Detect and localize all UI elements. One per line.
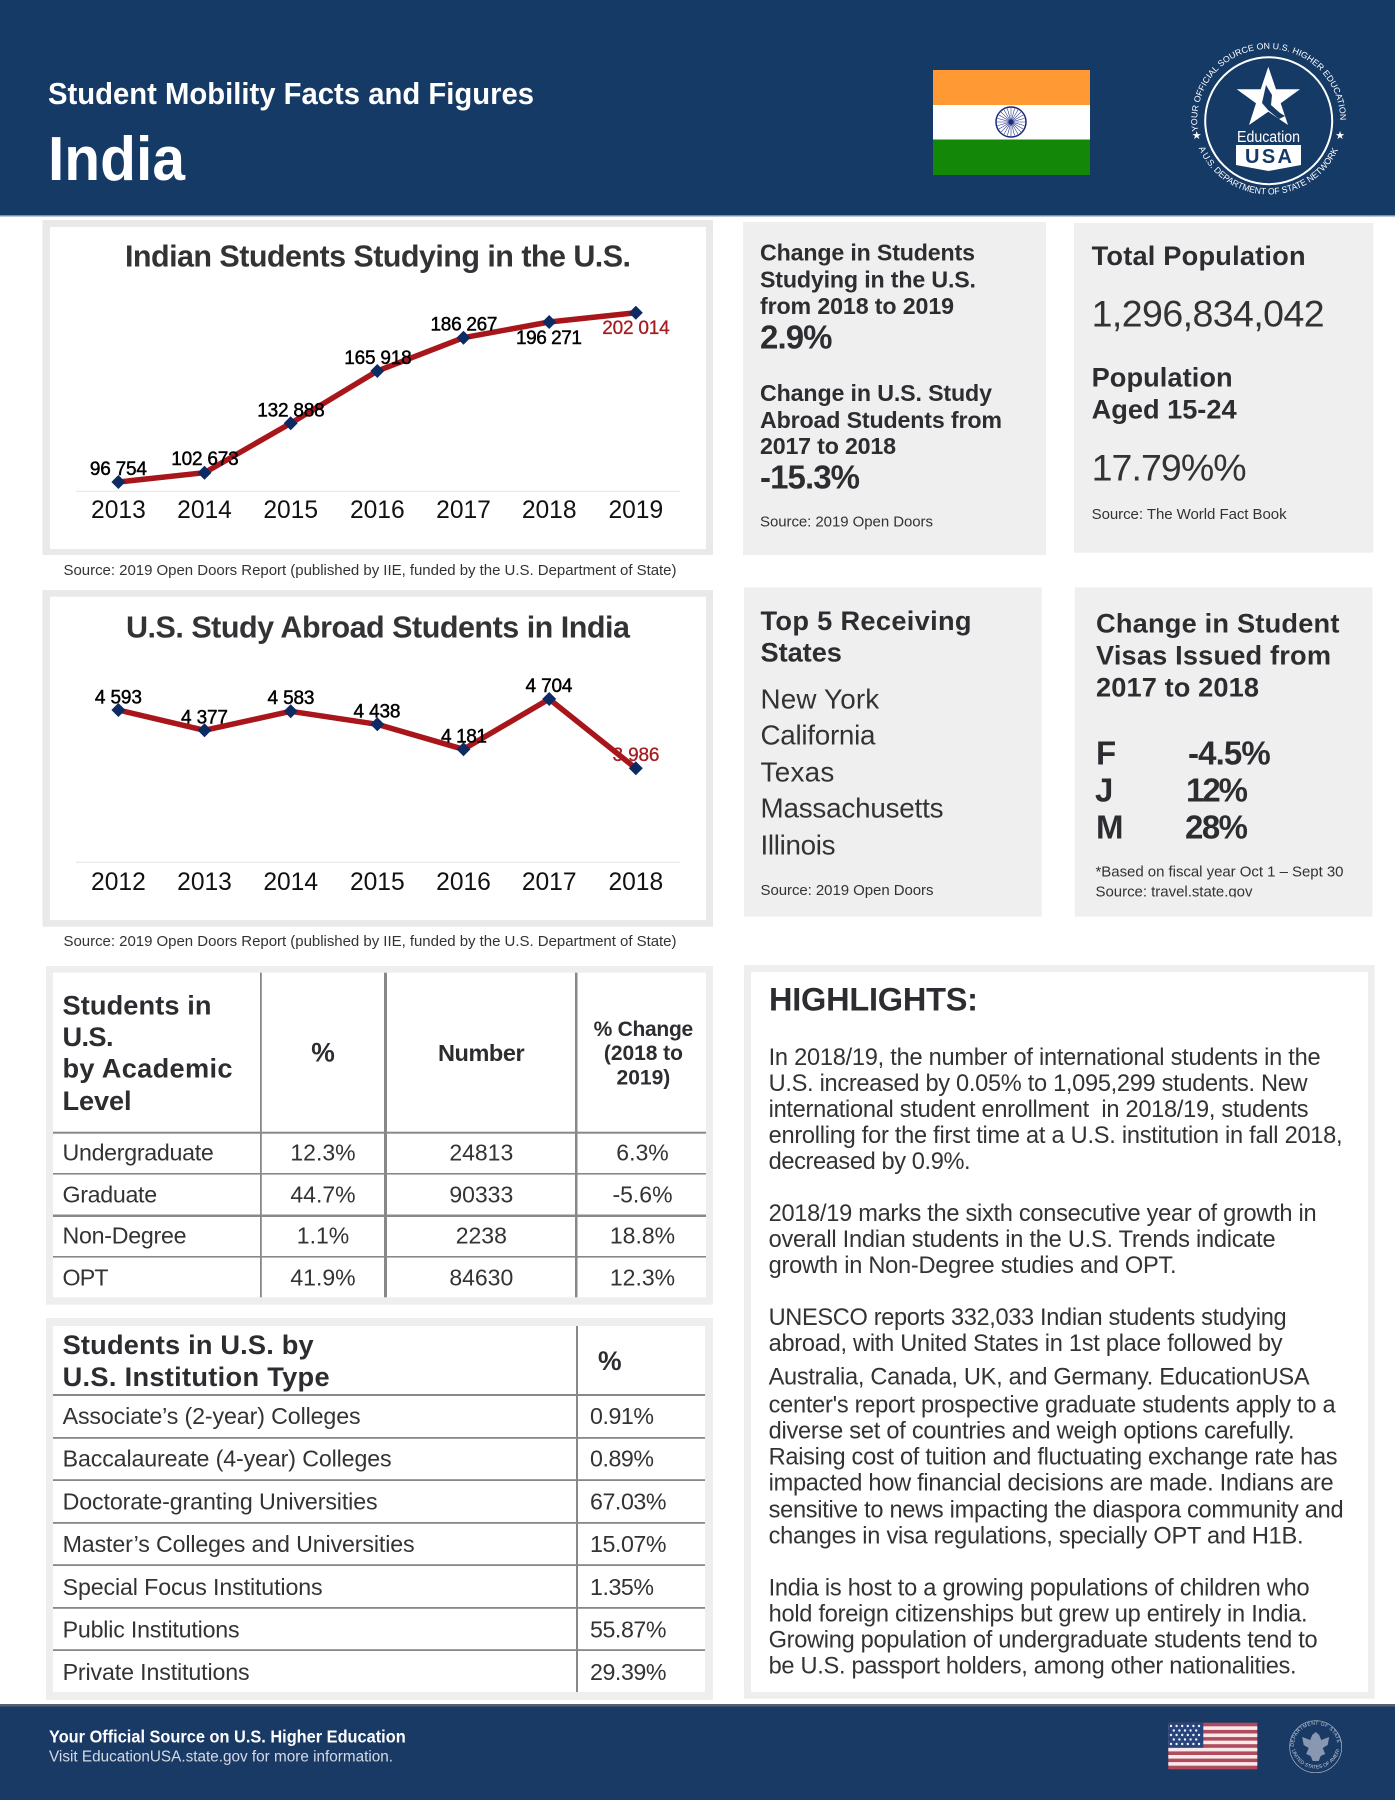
population aged heading — [1092, 362, 1237, 425]
value labels: 102 673 — [171, 449, 239, 470]
row: Non-Degree: 1.1% — [297, 1222, 349, 1248]
table header: (2018 to — [604, 1042, 683, 1065]
value labels: 165 918 — [344, 348, 412, 369]
row: Undergraduate: Undergraduate — [62, 1140, 214, 1166]
row: Master's — [63, 1531, 667, 1557]
population aged heading: Population — [1092, 362, 1233, 393]
table header: % Change — [594, 1018, 693, 1041]
row: Master's: 15.07% — [590, 1531, 666, 1557]
table header: 2019) — [617, 1066, 670, 1089]
paragraph 3: Raising cost of tuition and fluctuating exchange rate has — [769, 1444, 1338, 1470]
panel: students by academic level table — [46, 966, 713, 1305]
source note: Source: travel.state.gov — [1096, 884, 1253, 901]
population aged value: 17.79%% — [1092, 447, 1247, 489]
icon: EducationUSA logo: ★ — [1335, 130, 1345, 142]
icon: India flag — [933, 70, 1090, 175]
row: Non-Degree: 18.8% — [610, 1222, 675, 1248]
paragraph 3: UNESCO reports 332,033 Indian students studying — [769, 1305, 1287, 1331]
heading: 2017 to 2018 — [1096, 672, 1259, 703]
stat: study abroad change — [760, 380, 1002, 495]
header banner — [0, 0, 1395, 216]
row: Associate's: 0.91% — [590, 1403, 654, 1429]
paragraph 4 — [769, 1576, 1318, 1679]
row: OPT — [62, 1265, 675, 1291]
table header: % — [598, 1346, 622, 1376]
panel: change in students — [743, 222, 1046, 555]
paragraph 2: 2018/19 marks the sixth consecutive year of growth in — [769, 1201, 1317, 1227]
row: Public — [63, 1617, 667, 1643]
row: Graduate — [62, 1182, 673, 1208]
icon: EducationUSA logo — [1191, 42, 1346, 194]
table header: by Academic — [62, 1053, 232, 1084]
panel: students by institution type table — [46, 1318, 713, 1700]
year axis labels: 2017 — [436, 497, 491, 524]
stat: students in U.S. change: from 2018 to 2019 — [760, 293, 954, 319]
states list: California — [760, 720, 876, 751]
visa values: 28% — [1185, 808, 1248, 845]
value labels: 4 704 — [526, 676, 573, 697]
panel: student visas — [1075, 587, 1372, 917]
source note chart 2: Source: 2019 Open Doors Report (published by IIE, funded by the U.S. Department of State) — [64, 933, 676, 950]
value labels — [90, 315, 670, 480]
year axis labels: 2015 — [350, 869, 405, 896]
row: OPT: 12.3% — [610, 1265, 675, 1291]
paragraph 3: impacted how financial decisions are made. Indians are — [769, 1471, 1334, 1497]
row: Private — [63, 1659, 667, 1685]
row: OPT: OPT — [62, 1265, 108, 1291]
source note: Source: The World Fact Book — [1092, 506, 1287, 523]
line series — [111, 306, 643, 489]
row: Associate's — [63, 1403, 654, 1429]
paragraph 3: diverse set of countries and weigh options carefully. — [769, 1418, 1295, 1444]
footer text: Visit EducationUSA.state.gov for more information. — [49, 1749, 393, 1766]
population aged heading: Aged 15-24 — [1092, 394, 1237, 425]
row: Special Focus: 1.35% — [590, 1574, 654, 1600]
stat: study abroad change: -15.3% — [760, 458, 860, 495]
year axis labels: 2018 — [522, 497, 577, 524]
stat: study abroad change: 2017 to 2018 — [760, 433, 896, 459]
year axis labels: 2014 — [263, 869, 318, 896]
panel: U.S. study abroad line chart — [42, 590, 713, 927]
stat: students in U.S. change — [760, 240, 976, 355]
icon: EducationUSA logo: USA — [1245, 146, 1292, 168]
paragraph 3: Australia, Canada, UK, and Germany. EducationUSA — [769, 1364, 1310, 1390]
value labels: 196 271 — [516, 328, 582, 349]
panel: population — [1074, 223, 1373, 553]
source note: Source: 2019 Open Doors — [760, 882, 934, 899]
visa values: 12% — [1186, 771, 1248, 808]
year axis labels: 2014 — [177, 497, 232, 524]
value labels: 186 267 — [430, 315, 498, 336]
source note: Source: 2019 Open Doors — [760, 514, 933, 531]
row: Baccalaureate: 0.89% — [590, 1446, 654, 1472]
paragraph 2: overall Indian students in the U.S. Trends indicate — [769, 1227, 1276, 1253]
row: Baccalaureate: Baccalaureate (4-year) Colleges — [63, 1446, 392, 1472]
value labels: 4 583 — [268, 688, 314, 709]
total population value: 1,296,834,042 — [1092, 293, 1325, 335]
table header: U.S. — [62, 1021, 114, 1052]
row: Graduate: 44.7% — [290, 1182, 356, 1208]
icon: EducationUSA logo: YOUR OFFICIAL SOURCE ON U.S. HIGHER EDUCATION — [1191, 42, 1346, 132]
states list: Massachusetts — [760, 793, 944, 824]
year axis labels: 2018 — [608, 869, 663, 896]
states list: Texas — [760, 757, 834, 788]
row: Public: Public Institutions — [63, 1617, 240, 1643]
row: Private: 29.39% — [590, 1659, 666, 1685]
icon: EducationUSA logo: A U.S. DEPARTMENT OF STATE NETWORK — [1198, 147, 1338, 194]
paragraph 2 — [769, 1201, 1317, 1279]
value labels: 4 377 — [181, 707, 228, 728]
icon: U.S. Department of State seal: UNITED STATES OF AMERICA — [1292, 1749, 1340, 1768]
row: Special Focus: Special Focus Institutions — [63, 1574, 323, 1600]
paragraph 3: sensitive to news impacting the diaspora community and — [769, 1497, 1344, 1523]
row: Private: Private Institutions — [63, 1659, 250, 1685]
paragraph 4: India is host to a growing populations of children who — [769, 1576, 1310, 1602]
paragraph 2: growth in Non-Degree studies and OPT. — [769, 1253, 1177, 1279]
footer text: Your Official Source on U.S. Higher Education — [49, 1727, 406, 1747]
row: OPT: 41.9% — [290, 1265, 356, 1291]
paragraph 1: U.S. increased by 0.05% to 1,095,299 students. New — [769, 1071, 1309, 1097]
row: Undergraduate — [62, 1140, 669, 1166]
table header: Number — [438, 1040, 525, 1066]
states list: New York — [760, 683, 879, 714]
panel: highlights — [744, 965, 1375, 1699]
source note — [1090, 864, 1344, 903]
panel: top receiving states — [744, 587, 1042, 917]
year axis labels — [91, 869, 663, 896]
paragraph 1: enrolling for the first time at a U.S. institution in fall 2018, — [769, 1123, 1343, 1149]
visa values — [1095, 734, 1271, 845]
icon: EducationUSA logo: ★ — [1192, 130, 1202, 142]
stat: students in U.S. change: 2.9% — [760, 318, 832, 355]
row: Doctorate: 67.03% — [590, 1488, 666, 1514]
paragraph 1: In 2018/19, the number of international students in the — [769, 1045, 1321, 1071]
total population heading: Total Population — [1092, 240, 1306, 271]
heading: Top 5 Receiving — [760, 605, 972, 636]
heading: Visas Issued from — [1096, 640, 1331, 671]
paragraph 4: hold foreign citizenships but grew up entirely in India. — [769, 1602, 1308, 1628]
value labels: 4 593 — [95, 687, 142, 708]
value labels: 3 986 — [612, 745, 660, 766]
row: Graduate: -5.6% — [612, 1182, 673, 1208]
row: Undergraduate: 6.3% — [616, 1140, 669, 1166]
source note: *Based on fiscal year Oct 1 – Sept 30 — [1096, 864, 1344, 881]
heading — [760, 605, 972, 668]
row: Public: 55.87% — [590, 1617, 666, 1643]
paragraph 3 — [769, 1305, 1344, 1549]
row: Non-Degree: Non-Degree — [62, 1222, 186, 1248]
row: Graduate: 90333 — [449, 1182, 513, 1208]
table header: Students in — [62, 989, 212, 1020]
row: OPT: 84630 — [449, 1265, 513, 1291]
paragraph 4: be U.S. passport holders, among other nationalities. — [769, 1653, 1297, 1679]
year axis labels: 2015 — [263, 497, 318, 524]
states list — [760, 683, 944, 860]
paragraph 4: Growing population of undergraduate students tend to — [769, 1628, 1318, 1654]
stat: students in U.S. change: Studying in the U.S. — [760, 266, 976, 292]
table header: Students in U.S. by — [63, 1329, 314, 1360]
header subtitle: Student Mobility Facts and Figures — [48, 77, 534, 111]
row: Graduate: Graduate — [62, 1182, 157, 1208]
table header: U.S. Institution Type — [63, 1361, 330, 1392]
year axis labels: 2016 — [436, 869, 491, 896]
panel: Indian students line chart — [42, 220, 713, 555]
year axis labels: 2017 — [522, 869, 577, 896]
value labels — [95, 676, 659, 766]
heading: States — [760, 637, 842, 668]
highlights heading: HIGHLIGHTS: — [769, 982, 978, 1018]
year axis labels: 2013 — [177, 869, 232, 896]
chart title: Indian Students Studying in the U.S. — [125, 240, 631, 274]
row: Non-Degree: 2238 — [456, 1222, 507, 1248]
footer text — [49, 1727, 406, 1766]
source note chart 1: Source: 2019 Open Doors Report (published by IIE, funded by the U.S. Department of State) — [64, 562, 676, 579]
year axis labels: 2016 — [350, 497, 405, 524]
paragraph 3: changes in visa regulations, specially OPT and H1B. — [769, 1523, 1304, 1549]
year axis labels: 2013 — [91, 497, 146, 524]
value labels: 4 181 — [441, 726, 487, 747]
table header: % — [311, 1038, 335, 1068]
row: Doctorate: Doctorate-granting Universities — [63, 1488, 378, 1514]
line series — [111, 692, 643, 775]
header country name: India — [48, 125, 185, 194]
heading: Change in Student — [1096, 608, 1339, 639]
value labels: 202 014 — [602, 318, 670, 339]
row: Undergraduate: 24813 — [449, 1140, 513, 1166]
stat: study abroad change: Change in U.S. Study — [760, 380, 992, 406]
row: Associate's: Associate’s (2-year) Colleges — [63, 1403, 361, 1429]
stat: study abroad change: Abroad Students from — [760, 407, 1002, 433]
year axis labels — [91, 497, 663, 524]
row: Non-Degree — [62, 1222, 675, 1248]
row: Baccalaureate — [63, 1446, 654, 1472]
value labels: 96 754 — [90, 459, 147, 480]
chart title: U.S. Study Abroad Students in India — [126, 610, 631, 644]
paragraph 1: international student enrollment in 2018/19, students — [769, 1097, 1309, 1123]
value labels: 132 888 — [257, 401, 325, 422]
heading — [1096, 608, 1339, 703]
icon: U.S. Department of State seal: DEPARTMENT OF STATE — [1290, 1721, 1341, 1746]
row: Special Focus — [63, 1574, 654, 1600]
states list: Illinois — [760, 829, 836, 860]
row: Master's: Master’s Colleges and Universities — [63, 1531, 415, 1557]
paragraph 3: center's report prospective graduate students apply to a — [769, 1392, 1336, 1418]
year axis labels: 2012 — [91, 869, 146, 896]
icon: U.S. flag — [1168, 1723, 1257, 1769]
paragraph 3: abroad, with United States in 1st place followed by — [769, 1331, 1283, 1357]
year axis labels: 2019 — [608, 497, 663, 524]
visa values: F — [1096, 734, 1116, 771]
table header: Level — [62, 1085, 132, 1116]
visa values: J — [1095, 771, 1113, 808]
visa values: -4.5% — [1188, 734, 1271, 771]
table header — [63, 1329, 622, 1392]
row: Undergraduate: 12.3% — [290, 1140, 356, 1166]
visa values: M — [1096, 808, 1124, 845]
icon: EducationUSA logo: Education — [1237, 129, 1300, 146]
paragraph 1 — [769, 1045, 1343, 1175]
stat: students in U.S. change: Change in Students — [760, 240, 975, 266]
value labels: 4 438 — [354, 701, 400, 722]
paragraph 1: decreased by 0.9%. — [769, 1149, 971, 1175]
row: Doctorate — [63, 1488, 667, 1514]
table header — [62, 989, 693, 1116]
